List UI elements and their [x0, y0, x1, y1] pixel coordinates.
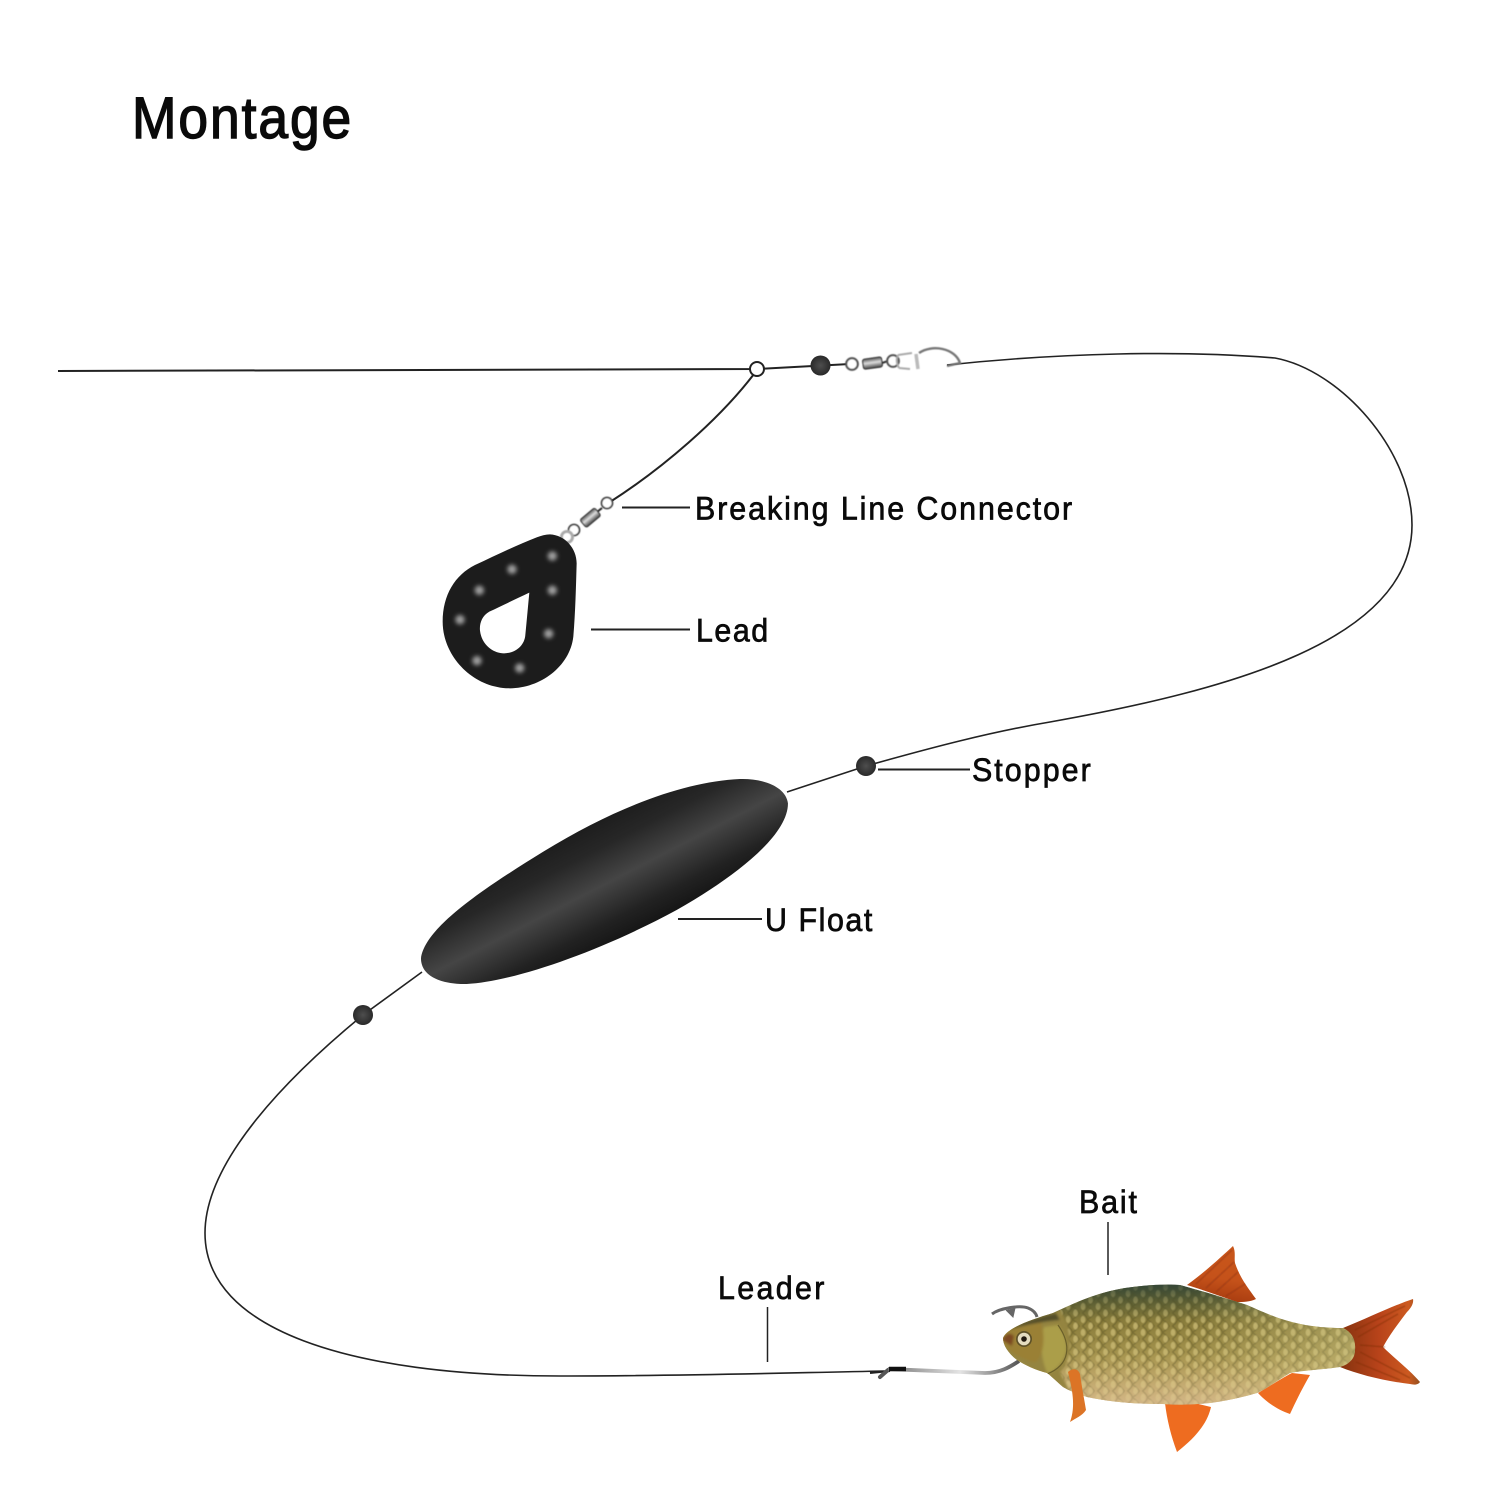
- eye: [1016, 1331, 1032, 1347]
- U float: [421, 779, 788, 984]
- lead weight: [443, 534, 577, 688]
- connector ring: [750, 362, 764, 376]
- hook: [870, 1307, 1037, 1377]
- label: Leader: Leader: [718, 1270, 824, 1306]
- ventral fin: [1165, 1402, 1211, 1452]
- label: Leader: [718, 1270, 824, 1362]
- top bead: [810, 356, 830, 376]
- label: Bait: [1079, 1184, 1137, 1275]
- scales and head: [1000, 1280, 1360, 1406]
- fishing line: main line: [58, 354, 1412, 1376]
- title: Montage: [132, 86, 353, 150]
- bait fish with hook: [870, 1246, 1420, 1452]
- label: Breaking Line Connector: Breaking Line Connector: [695, 491, 1072, 527]
- icon: swivel and snap: [846, 348, 960, 370]
- dorsal fin: [1187, 1246, 1256, 1302]
- icon: lead swivel: [562, 498, 612, 542]
- label: Lead: Lead: [696, 613, 768, 649]
- label: U Float: U Float: [765, 902, 873, 938]
- label: Bait: Bait: [1079, 1184, 1137, 1220]
- stopper bead: [856, 756, 876, 776]
- tail fin: [1340, 1299, 1420, 1385]
- pectoral fin: [1068, 1369, 1086, 1422]
- label: Stopper: Stopper: [972, 752, 1091, 788]
- body: [1003, 1285, 1355, 1405]
- lower bead: [353, 1005, 373, 1025]
- anal fin: [1258, 1373, 1310, 1414]
